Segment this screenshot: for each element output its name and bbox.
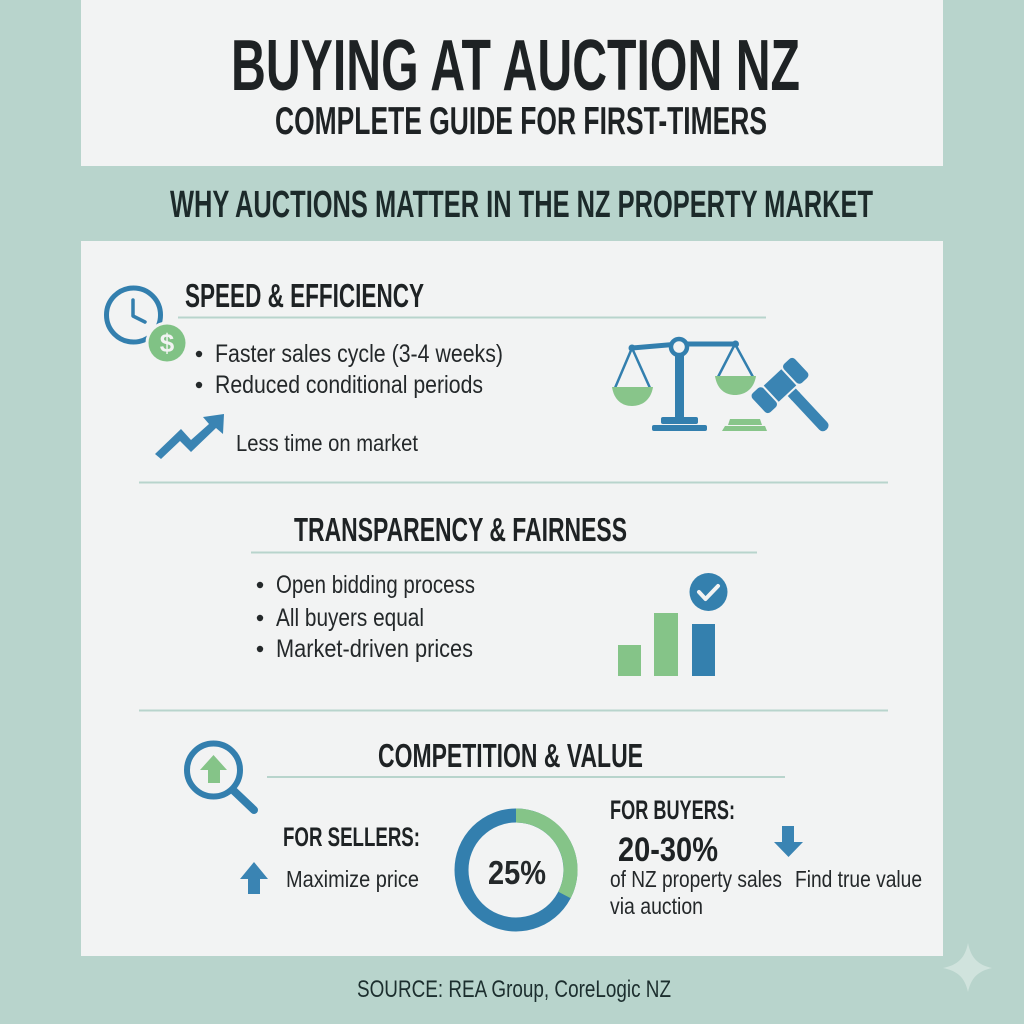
icon: clock with dollar: $ <box>160 328 175 358</box>
buyers column: of NZ property sales <box>610 866 782 892</box>
icon: clock with dollar <box>106 288 188 364</box>
heading: transparency: TRANSPARENCY & FAIRNESS <box>294 511 627 548</box>
bullet list: All buyers equal <box>276 604 424 632</box>
panel: speed and efficiency <box>106 277 845 459</box>
panel: competition and value <box>187 737 922 924</box>
bullet list: Market-driven prices <box>276 635 473 663</box>
icon: magnifier with arrow <box>187 744 254 810</box>
bullet list <box>196 340 503 399</box>
buyers column <box>610 795 922 919</box>
buyers column: Find true value <box>795 866 922 892</box>
donut chart 25%: 25% <box>488 854 546 891</box>
subtitle: COMPLETE GUIDE FOR FIRST-TIMERS <box>275 100 767 143</box>
sellers column <box>240 822 420 894</box>
icon: scales and gavel <box>612 339 845 452</box>
source: SOURCE: REA Group, CoreLogic NZ <box>357 976 671 1003</box>
sellers column: Maximize price <box>286 866 419 892</box>
bar chart with check <box>618 573 728 676</box>
bullet list: Faster sales cycle (3-4 weeks) <box>215 340 503 368</box>
bullet list: Reduced conditional periods <box>215 371 483 399</box>
buyers column: FOR BUYERS: <box>610 795 735 825</box>
heading: competition: COMPETITION & VALUE <box>378 737 643 774</box>
bullet list: Open bidding process <box>276 571 475 599</box>
icon: up arrow <box>240 862 268 894</box>
buyers column: 20-30% <box>618 831 718 869</box>
icon: rising arrow <box>155 414 224 459</box>
icon: down arrow <box>774 826 803 857</box>
panel: title <box>81 0 943 166</box>
heading: speed: SPEED & EFFICIENCY <box>185 277 424 314</box>
panel: transparency and fairness <box>251 511 757 676</box>
text: less time: Less time on market <box>236 430 419 456</box>
panel: main content <box>81 241 943 956</box>
sellers column: FOR SELLERS: <box>283 822 420 852</box>
icon: sparkle <box>943 943 992 992</box>
bullet list <box>257 571 475 663</box>
buyers column: via auction <box>610 893 703 919</box>
donut chart 25% <box>462 815 571 924</box>
